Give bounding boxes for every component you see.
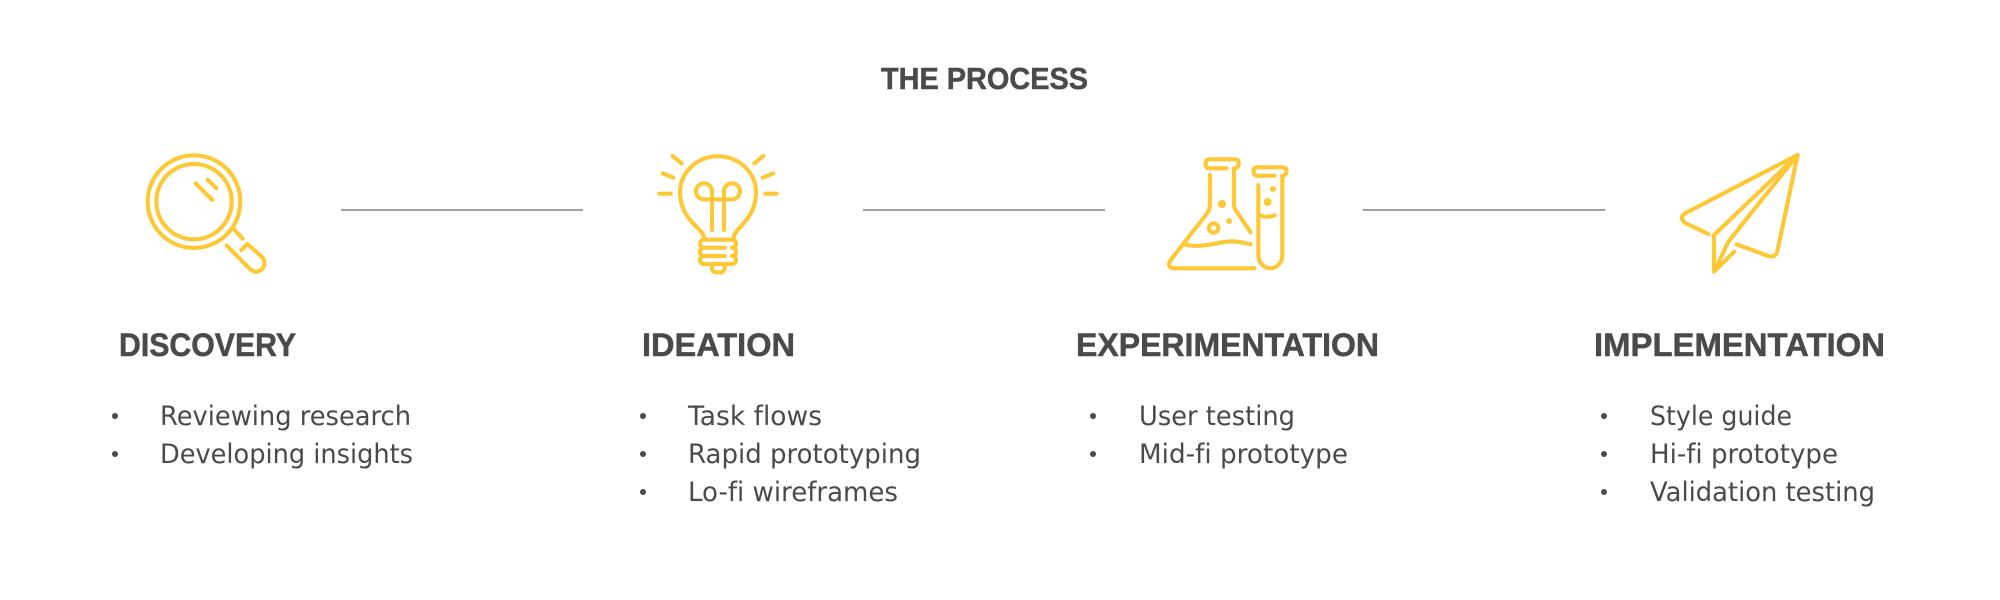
column: ideation [640, 327, 921, 508]
list: discovery items: Reviewing research [160, 401, 411, 432]
heading: discovery: DISCOVERY [119, 327, 296, 363]
list: ideation items: Task flows [687, 401, 822, 432]
connector: experimentation to implementation [1363, 209, 1605, 211]
connector: ideation to experimentation [863, 209, 1105, 211]
list: discovery items [112, 401, 413, 470]
heading: experimentation: EXPERIMENTATION [1076, 327, 1379, 363]
list: ideation items: Rapid prototyping [688, 439, 921, 470]
heading: ideation: IDEATION [642, 327, 795, 363]
list: experimentation items: User testing [1139, 401, 1295, 432]
column: discovery [112, 327, 413, 470]
list: ideation items: Lo-fi wireframes [688, 477, 898, 508]
icon: light bulb [659, 156, 777, 272]
column: experimentation [1076, 327, 1379, 470]
list: ideation items [640, 401, 921, 508]
column: implementation [1594, 327, 1885, 508]
list: implementation items: Style guide [1650, 401, 1792, 432]
list: implementation items: Hi-fi prototype [1650, 439, 1838, 470]
title: THE PROCESS [881, 61, 1088, 96]
list: discovery items: Developing insights [160, 439, 413, 470]
icon: paper plane [1682, 155, 1798, 272]
list: implementation items [1601, 401, 1875, 508]
icon: flask and test tube [1169, 159, 1286, 268]
connector: discovery to ideation [341, 209, 583, 211]
list: implementation items: Validation testing [1650, 477, 1875, 508]
heading: implementation: IMPLEMENTATION [1594, 327, 1885, 363]
list: experimentation items: Mid-fi prototype [1139, 439, 1348, 470]
list: experimentation items [1090, 401, 1348, 470]
icon: magnifying glass [148, 155, 264, 272]
